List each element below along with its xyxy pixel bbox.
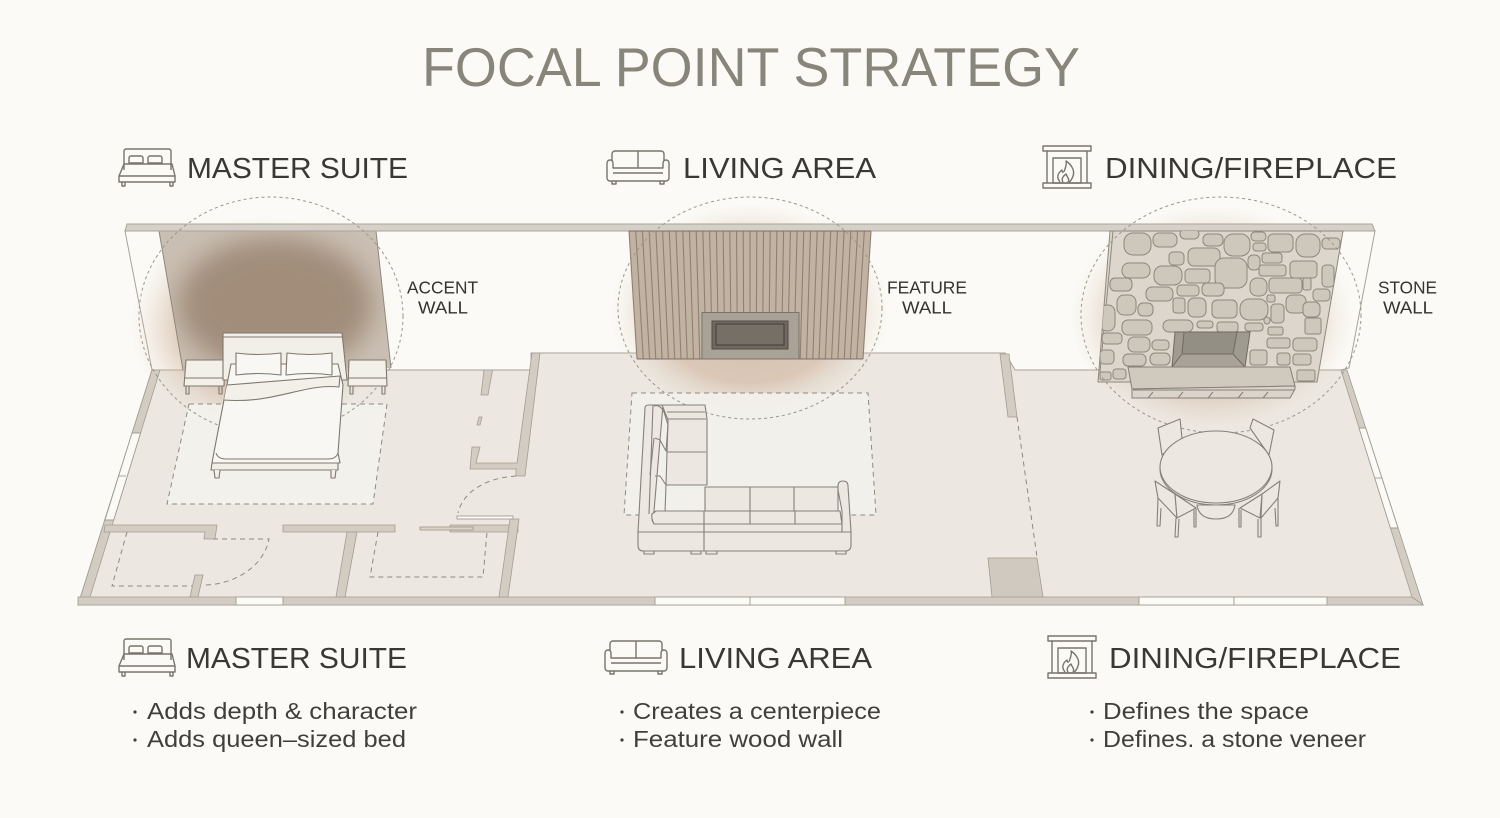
pedestal: [1197, 505, 1235, 519]
heading: master suite: MASTER SUITE: [187, 153, 408, 185]
icon: sofa: [605, 641, 667, 674]
back chairs: [1158, 419, 1182, 455]
focal glow: master suite: [130, 217, 394, 433]
fireplace insert: [702, 312, 799, 359]
pillows: [236, 353, 281, 375]
rug: master suite: [167, 404, 387, 504]
mattress: [212, 364, 343, 463]
bed and nightstands: [184, 333, 387, 478]
nightstand left: [184, 360, 225, 394]
heading: master suite: MASTER SUITE: [186, 643, 407, 675]
focal circle: master suite: [139, 197, 403, 435]
label: stone wall: WALL: [1383, 298, 1433, 318]
focal glow: dining/fireplace: [1070, 206, 1354, 430]
label: feature wall: FEATURE: [887, 278, 967, 298]
right wall: [1341, 370, 1423, 605]
icon: bed: [119, 639, 175, 676]
bottom panel: master suite: [119, 639, 417, 752]
bottom wall: [78, 597, 1423, 605]
bullet list: dining/fireplace: Defines. a stone veneer: [1103, 726, 1366, 752]
title: FOCAL POINT STRATEGY: [422, 36, 1080, 98]
left wall: [78, 370, 160, 605]
sofa base: [638, 532, 851, 551]
chaise seats: [662, 405, 707, 485]
focal circle: living area: [618, 197, 882, 419]
label: feature wall: WALL: [902, 298, 952, 318]
label: accent wall: ACCENT: [407, 278, 478, 298]
back wall face: [125, 231, 1375, 370]
bottom panel: living area: [605, 641, 881, 752]
bullet list: living area: Feature wood wall: [633, 726, 843, 752]
bullet list: master suite: Adds queen–sized bed: [147, 726, 406, 752]
closet block: [988, 558, 1043, 597]
firebox: [1172, 332, 1250, 367]
mantel: [1128, 367, 1295, 398]
front chair right: [1239, 481, 1280, 537]
heading: living area: LIVING AREA: [679, 643, 873, 675]
heading: dining/fireplace: DINING/FIREPLACE: [1109, 643, 1401, 675]
top wall cap: [125, 224, 1375, 231]
floor plan: [78, 197, 1423, 605]
top header: master suite: [119, 149, 408, 186]
nightstand right: [348, 360, 387, 394]
dining set: [1155, 419, 1280, 537]
duvet fold: [224, 376, 340, 401]
floor slab: [78, 353, 1423, 605]
frame: [211, 463, 338, 470]
label: accent wall: WALL: [418, 298, 468, 318]
bullet list: living area: Creates a centerpiece: [633, 698, 881, 724]
icon: sofa: [607, 151, 669, 184]
focal glow: living area: [610, 204, 890, 420]
dashed circles and rugs: [112, 393, 1037, 586]
windows: [105, 428, 1398, 605]
bullet list: dining/fireplace: Defines the space: [1103, 698, 1309, 724]
icon: bed: [119, 149, 175, 186]
stone wall: [1098, 229, 1343, 398]
seat cushions: [705, 487, 838, 511]
heading: dining/fireplace: DINING/FIREPLACE: [1105, 153, 1397, 185]
table top: [1160, 433, 1272, 505]
icon: fireplace: [1043, 146, 1091, 188]
feature wall: wood slats: [629, 231, 871, 359]
top header: dining/fireplace: [1043, 146, 1397, 188]
rug: living area: [624, 393, 876, 515]
top header: living area: [607, 151, 877, 185]
walls: [78, 353, 1423, 605]
bullet list: master suite: Adds depth & character: [147, 698, 417, 724]
label: stone wall: STONE: [1378, 278, 1437, 298]
icon: fireplace: [1048, 636, 1096, 678]
heading: living area: LIVING AREA: [683, 153, 877, 185]
sofa back and left: [638, 405, 704, 532]
sectional sofa: [638, 405, 851, 554]
bullet list: master suite: [133, 698, 417, 752]
headboard: [223, 333, 347, 380]
bullet list: dining/fireplace: [1090, 698, 1366, 752]
bullet list: living area: [620, 698, 881, 752]
bottom panel: dining/fireplace: [1048, 636, 1401, 752]
accent wall: [159, 231, 391, 373]
right arm: [838, 481, 851, 532]
stones: [1100, 229, 1340, 381]
front chair left: [1155, 481, 1196, 537]
focal circle: dining/fireplace: [1081, 197, 1361, 433]
